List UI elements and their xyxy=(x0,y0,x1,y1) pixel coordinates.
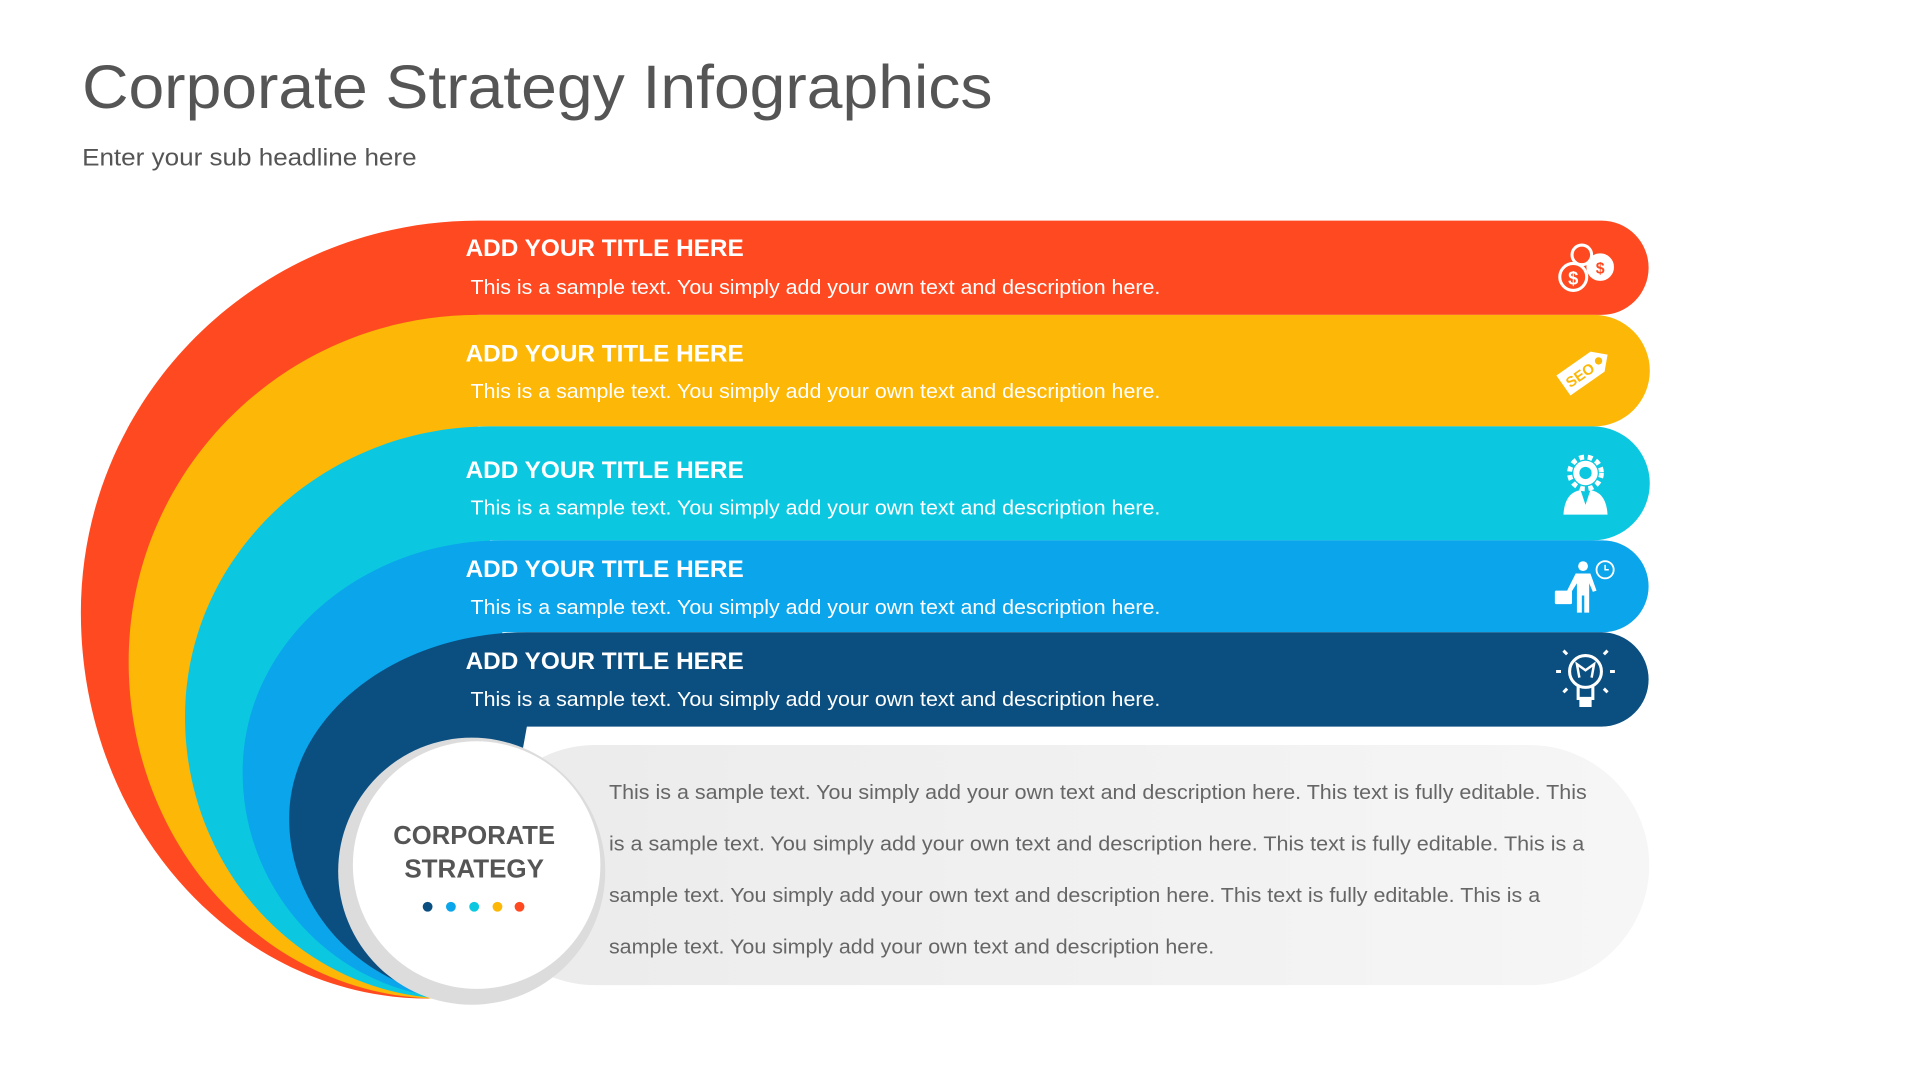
band: blue: This is a sample text. You simply add your own text and description here. xyxy=(471,597,1160,619)
band: yellow xyxy=(129,315,1650,999)
icon: coins: $ xyxy=(1596,260,1605,277)
band: navy: This is a sample text. You simply add your own text and description here. xyxy=(471,689,1160,711)
panel: description pill: This is a sample text. You simply add your own text and description here. This text is fully editable. This xyxy=(609,782,1587,804)
icon: coins: $ xyxy=(1568,267,1578,288)
panel: description pill: sample text. You simply add your own text and description here. This text is fully editable. This is a xyxy=(609,885,1541,907)
band: navy xyxy=(289,632,1649,999)
band: red xyxy=(81,221,1649,999)
band: red: This is a sample text. You simply add your own text and description here. xyxy=(471,277,1160,299)
center circle: corporate strategy: CORPORATE xyxy=(393,822,555,850)
subtitle: Enter your sub headline here xyxy=(82,144,417,171)
band: cyan: ADD YOUR TITLE HERE xyxy=(466,457,744,484)
band: red: ADD YOUR TITLE HERE xyxy=(466,235,744,262)
icon: gear person xyxy=(1563,457,1608,515)
band: blue xyxy=(243,540,1649,999)
icon: lightbulb xyxy=(1556,651,1615,707)
center circle: corporate strategy xyxy=(338,738,605,1005)
band: yellow: ADD YOUR TITLE HERE xyxy=(466,340,744,367)
title: Corporate Strategy Infographics xyxy=(82,53,992,121)
panel: description pill: is a sample text. You simply add your own text and description here. This text is fully editable. This is a xyxy=(609,833,1585,855)
band: cyan: This is a sample text. You simply add your own text and description here. xyxy=(471,498,1160,520)
icon: seo tag: SEO xyxy=(1563,361,1598,391)
band: navy: ADD YOUR TITLE HERE xyxy=(466,648,744,675)
center circle: corporate strategy: STRATEGY xyxy=(404,855,544,883)
band: cyan xyxy=(185,426,1650,999)
icon: seo tag xyxy=(1556,345,1615,396)
icon: businessman with clock xyxy=(1555,561,1614,613)
icon: coins xyxy=(1560,245,1612,290)
panel: description pill xyxy=(475,745,1649,985)
band: blue: ADD YOUR TITLE HERE xyxy=(466,556,744,583)
panel: description pill: sample text. You simply add your own text and description here. xyxy=(609,936,1214,958)
band: yellow: This is a sample text. You simply add your own text and description here. xyxy=(471,381,1160,403)
